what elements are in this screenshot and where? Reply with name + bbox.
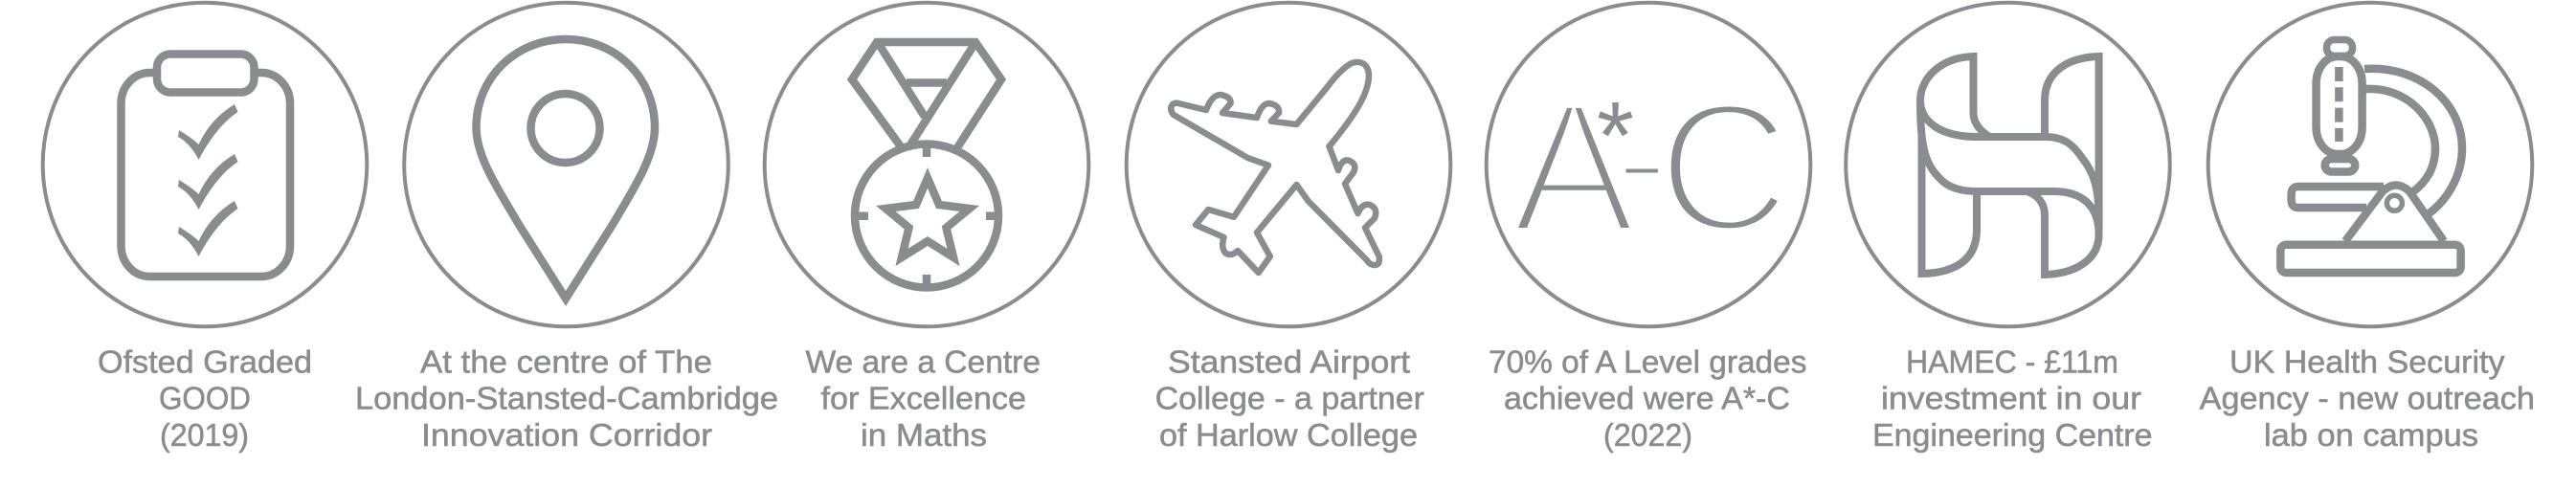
caption: HAMEC: HAMEC - £11m	[1906, 344, 2118, 379]
caption: maths: We are a Centre	[806, 344, 1041, 379]
panel: UK Health Security Agency	[2200, 3, 2535, 453]
caption: A level results: achieved were A*-C	[1504, 381, 1790, 416]
caption: HAMEC: investment in our	[1881, 381, 2141, 416]
caption: maths: for Excellence	[821, 381, 1026, 416]
panel: airport	[1127, 3, 1450, 453]
caption: A level results	[1489, 344, 1806, 453]
caption: UK Health Security Agency: UK Health Security	[2229, 344, 2505, 379]
caption: Ofsted: (2019)	[160, 417, 249, 453]
icon: medal	[765, 3, 1088, 326]
panel: HAMEC	[1846, 3, 2170, 453]
caption: Ofsted: GOOD	[159, 381, 251, 416]
caption: location: London-Stansted-Cambridge	[355, 381, 778, 416]
caption: location: At the centre of The	[420, 344, 712, 379]
caption: location	[355, 344, 778, 453]
icon: A*-C grades	[1487, 3, 1810, 326]
caption: UK Health Security Agency	[2200, 344, 2535, 453]
panel: A level results	[1487, 3, 1810, 453]
icon: HAMEC H logo	[1846, 3, 2170, 326]
icon: map pin	[404, 3, 728, 326]
caption: airport: Stansted Airport	[1168, 344, 1410, 379]
caption: location: Innovation Corridor	[421, 417, 712, 453]
caption: HAMEC	[1872, 344, 2152, 453]
caption: A level results: 70% of A Level grades	[1489, 344, 1806, 379]
caption: maths	[806, 344, 1041, 453]
caption: airport: of Harlow College	[1159, 417, 1418, 453]
caption: airport: College - a partner	[1155, 381, 1424, 416]
panel: Ofsted	[43, 3, 367, 453]
caption: UK Health Security Agency: Agency - new outreach	[2200, 381, 2535, 416]
caption: airport	[1155, 344, 1424, 453]
icon: A*-C grades: –	[1625, 134, 1658, 198]
panel: maths	[765, 3, 1088, 453]
icon: aeroplane	[1127, 3, 1450, 326]
panel: location	[355, 3, 778, 453]
caption: A level results: (2022)	[1603, 417, 1692, 453]
icon: clipboard with ticks	[43, 3, 367, 326]
icon: A*-C grades: A	[1512, 63, 1636, 272]
caption: Ofsted: Ofsted Graded	[98, 344, 312, 379]
icon: A*-C grades: *	[1597, 82, 1634, 189]
icon: A*-C grades: C	[1658, 64, 1790, 270]
caption: UK Health Security Agency: lab on campus	[2264, 417, 2478, 453]
caption: maths: in Maths	[861, 417, 987, 453]
icon: microscope	[2208, 3, 2532, 326]
caption: HAMEC: Engineering Centre	[1872, 417, 2152, 453]
caption: Ofsted	[98, 344, 312, 453]
